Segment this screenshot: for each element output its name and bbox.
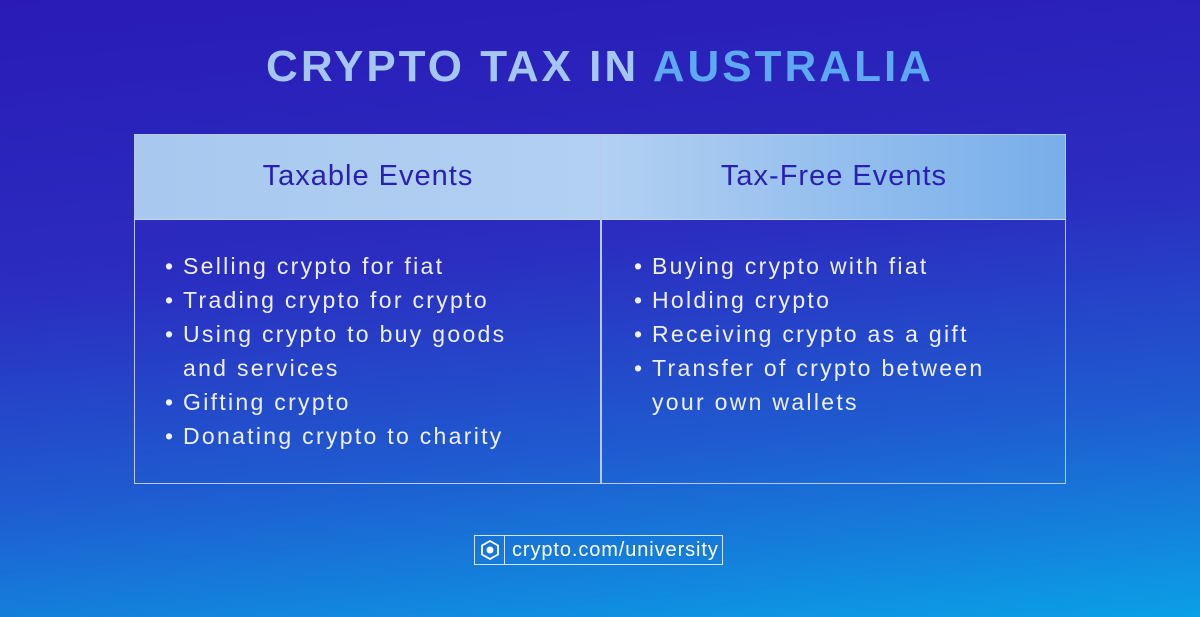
list: tax-free events: your own wallets [652, 389, 859, 415]
list: tax-free events: Transfer of crypto between [652, 355, 985, 381]
list: tax-free events: Holding crypto [652, 287, 831, 313]
list: taxable events: Donating crypto to charity [183, 423, 504, 449]
heading: taxable events: Taxable Events [263, 160, 473, 192]
footer: crypto.com/university: crypto.com/university [512, 538, 719, 560]
list: taxable events: Selling crypto for fiat [183, 253, 444, 279]
list: taxable events: Using crypto to buy goods [183, 321, 506, 347]
footer: crypto.com/university [474, 535, 723, 565]
icon: crypto.com logo [475, 536, 505, 564]
header row [135, 135, 1065, 220]
title: CRYPTO TAX IN AUSTRALIA [266, 42, 934, 91]
list: taxable events [166, 253, 506, 449]
list: taxable events: and services [183, 355, 340, 381]
list: taxable events: Gifting crypto [183, 389, 351, 415]
heading: tax-free events: Tax-Free Events [721, 160, 947, 192]
table [134, 134, 1066, 484]
list: tax-free events [634, 253, 985, 415]
list: taxable events: Trading crypto for crypto [183, 287, 489, 313]
list: tax-free events: Buying crypto with fiat [652, 253, 929, 279]
list: tax-free events: Receiving crypto as a gift [652, 321, 969, 347]
